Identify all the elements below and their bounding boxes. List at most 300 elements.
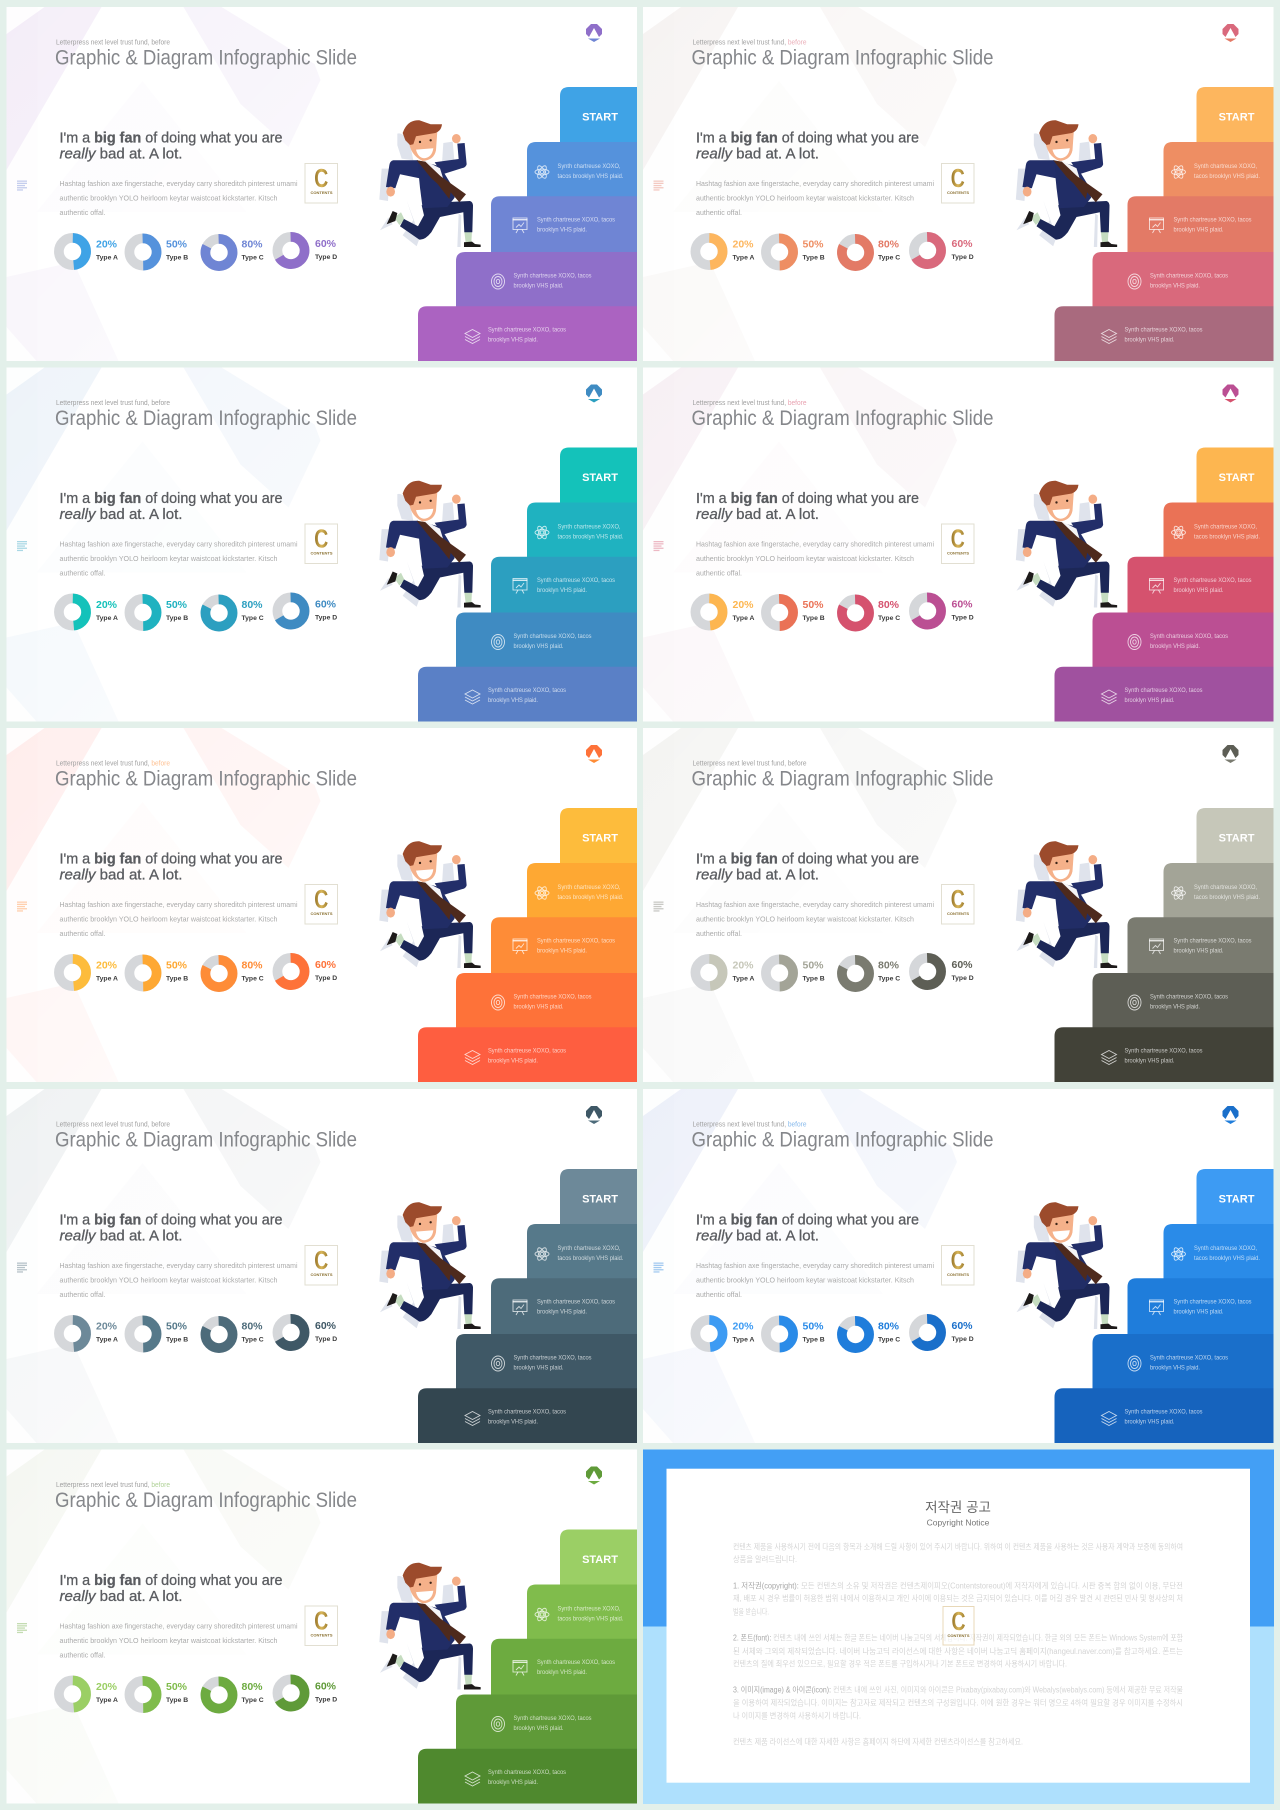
- donut B 50%: 50%: [166, 960, 188, 972]
- donut D 60%: Type D: [952, 254, 974, 261]
- gold badge: C: [951, 884, 965, 914]
- step 5: [1054, 667, 1274, 722]
- donut B 50%: 50%: [802, 599, 824, 611]
- step 1 start: START: [1219, 1194, 1255, 1206]
- heading: I'm a big fan of doing what you are: [696, 130, 919, 146]
- donut A 20%: Type A: [96, 1336, 118, 1344]
- background logo watermark: [6, 368, 346, 722]
- body text: authentic brooklyn YOLO heirloom keytar waistcoat kickstarter. Kitsch: [60, 1276, 278, 1284]
- icon: side menu: [17, 180, 27, 191]
- step 3: Synth chartreuse XOXO, tacos: [1174, 577, 1252, 584]
- gold badge: CONTENTS: [947, 1272, 969, 1277]
- heading: I'm a big fan of doing what you are: [60, 1212, 282, 1228]
- step 2: Synth chartreuse XOXO,: [558, 163, 621, 170]
- notice intro: 상품을 알려드립니다.: [733, 1554, 797, 1564]
- gold badge: [942, 1245, 974, 1285]
- step 4: Synth chartreuse XOXO, tacos: [514, 1715, 592, 1722]
- donut B 50%: 50%: [166, 599, 188, 611]
- step 2: tacos brooklyn VHS plaid.: [1194, 1255, 1260, 1262]
- step 3: [491, 1278, 637, 1335]
- icon: logo: [586, 384, 602, 402]
- step 4: brooklyn VHS plaid.: [1150, 1004, 1200, 1010]
- gold badge: [942, 524, 974, 564]
- step 5: Synth chartreuse XOXO, tacos: [488, 326, 566, 334]
- icon: side menu: [654, 541, 664, 551]
- step 2: Synth chartreuse XOXO,: [1194, 1245, 1257, 1252]
- heading: I'm a big fan of doing what you are: [60, 490, 282, 507]
- donut D 60%: [914, 1319, 974, 1346]
- step 4: Synth chartreuse XOXO, tacos: [1150, 272, 1228, 280]
- body text: authentic offal.: [60, 1290, 106, 1299]
- donut B 50%: Type B: [166, 615, 188, 622]
- donut D 60%: 60%: [315, 238, 337, 250]
- step 5: [418, 1749, 637, 1804]
- heading: [696, 130, 919, 162]
- step 1 start: START: [582, 472, 618, 484]
- donut A 20%: Type A: [732, 1336, 754, 1344]
- step 2: Synth chartreuse XOXO,: [558, 1606, 621, 1612]
- donut D 60%: Type D: [315, 614, 337, 622]
- background logo watermark: [643, 728, 983, 1082]
- donut A 20%: [695, 958, 754, 987]
- step 2: [527, 1584, 637, 1640]
- step 2: tacos brooklyn VHS plaid.: [1194, 173, 1260, 180]
- illustration: running businessman: [1016, 120, 1117, 247]
- notice clause 2: 된 서체와 그외의 제작되었습니다. 네이버 나눔고딕 라이선스에 대한 사항은 네이버 나눔고딕 홈페이지(hangeul.naver.com)를 참고하세요. 폰트는: [733, 1646, 1183, 1656]
- donut D 60%: Type D: [315, 1696, 337, 1704]
- donut B 50%: [129, 959, 188, 987]
- icon: side menu: [654, 180, 664, 191]
- step 3: Synth chartreuse XOXO, tacos: [1174, 1298, 1252, 1306]
- notice clause 1: 재, 배포 시 경우 법률이 허용한 범위 내에서 이용하시고 개인 사이에 이용되는 것은 금지되어 있습니다. 이를 어길 경우 발견 시 관련된 민사 및 형사상의 처: [733, 1593, 1183, 1603]
- body text: authentic offal.: [60, 1650, 106, 1660]
- panel background: [6, 7, 637, 361]
- step 4: [456, 973, 637, 1028]
- panel background: [643, 728, 1274, 1082]
- step 1 start: [560, 87, 637, 143]
- step 3: Synth chartreuse XOXO, tacos: [1174, 938, 1252, 944]
- step 4: brooklyn VHS plaid.: [514, 1364, 564, 1372]
- donut D 60%: Type D: [952, 1336, 974, 1343]
- donut C 80%: Type C: [242, 615, 264, 622]
- donut C 80%: [205, 960, 264, 987]
- heading: [696, 1212, 919, 1244]
- step 4: [1092, 612, 1274, 668]
- icon: logo: [1222, 384, 1238, 402]
- upper blue band: [643, 1450, 1274, 1626]
- body text: authentic brooklyn YOLO heirloom keytar waistcoat kickstarter. Kitsch: [696, 1276, 914, 1284]
- donut D 60%: Type D: [315, 975, 337, 982]
- step 5: [418, 667, 637, 722]
- step 1 start: START: [582, 112, 618, 124]
- icon: side menu: [654, 902, 664, 912]
- donut D 60%: [277, 597, 337, 625]
- panel background: [643, 368, 1274, 722]
- step 4: Synth chartreuse XOXO, tacos: [514, 633, 592, 640]
- donut C 80%: Type C: [878, 254, 900, 262]
- step 5: brooklyn VHS plaid.: [488, 336, 538, 344]
- donut C 80%: Type C: [878, 1336, 900, 1344]
- heading: [60, 1212, 282, 1244]
- step 1 start: [560, 808, 637, 864]
- donut A 20%: [58, 1680, 118, 1708]
- donut A 20%: [58, 958, 118, 987]
- gold badge: CONTENTS: [310, 550, 333, 556]
- panel background: [643, 1089, 1274, 1443]
- step 4: [1092, 973, 1274, 1028]
- slide 9: green: [6, 1450, 637, 1804]
- step 3: brooklyn VHS plaid.: [1174, 226, 1224, 234]
- heading: really bad at. A lot.: [696, 146, 819, 162]
- body text: Hashtag fashion axe fingerstache, everyday carry shoreditch pinterest umami: [696, 179, 934, 188]
- step 3: [491, 196, 637, 253]
- donut B 50%: [129, 238, 188, 266]
- donut D 60%: 60%: [315, 959, 337, 971]
- icon: logo: [586, 745, 602, 763]
- notice title: Copyright Notice: [927, 1518, 990, 1528]
- panel background: [6, 1450, 637, 1804]
- step 4: [1092, 252, 1274, 307]
- step 2: Synth chartreuse XOXO,: [1194, 163, 1257, 170]
- gold badge: CONTENTS: [947, 550, 969, 556]
- notice clause 2: 컨텐츠의 질에 최우선 있으므로, 필요할 경우 적은 폰트를 구입하시거나 기본 폰트로 변경하여 사용하시기 바랍니다.: [733, 1658, 1067, 1668]
- body text: Hashtag fashion axe fingerstache, everyday carry shoreditch pinterest umami: [60, 179, 298, 188]
- donut D 60%: 60%: [315, 598, 337, 610]
- donut A 20%: 20%: [96, 1681, 118, 1693]
- title: Graphic & Diagram Infographic Slide: [55, 1128, 357, 1152]
- donut A 20%: 20%: [732, 1320, 754, 1332]
- gold badge: C: [314, 1245, 328, 1275]
- step 4: brooklyn VHS plaid.: [514, 1004, 564, 1010]
- step 1 start: START: [582, 1194, 618, 1206]
- step 4: Synth chartreuse XOXO, tacos: [1150, 994, 1228, 1000]
- step 1 start: START: [582, 1554, 618, 1566]
- step 3: brooklyn VHS plaid.: [537, 587, 587, 594]
- gold badge: C: [951, 163, 965, 193]
- background logo watermark: [6, 7, 346, 361]
- donut A 20%: [695, 237, 754, 266]
- slide 2: orange rose: [643, 7, 1274, 361]
- body text: Hashtag fashion axe fingerstache, everyday carry shoreditch pinterest umami: [60, 900, 298, 909]
- step 3: Synth chartreuse XOXO, tacos: [537, 216, 615, 224]
- step 5: brooklyn VHS plaid.: [1124, 336, 1175, 344]
- donut D 60%: 60%: [315, 1680, 337, 1692]
- white notice card: [666, 1469, 1250, 1783]
- notice intro: [733, 1542, 1183, 1564]
- step 3: [1128, 557, 1274, 614]
- body text: authentic brooklyn YOLO heirloom keytar waistcoat kickstarter. Kitsch: [60, 554, 278, 563]
- donut B 50%: Type B: [802, 254, 825, 262]
- heading: really bad at. A lot.: [60, 146, 182, 162]
- donut C 80%: [205, 599, 264, 627]
- heading: really bad at. A lot.: [60, 1228, 182, 1244]
- eyebrow text: Letterpress next level trust fund, before: [692, 758, 806, 768]
- step 3: brooklyn VHS plaid.: [537, 1308, 587, 1316]
- donut B 50%: [766, 1320, 825, 1348]
- body text: [696, 540, 934, 578]
- icon: side menu: [17, 1623, 27, 1633]
- body text: [60, 540, 298, 578]
- step 2: Synth chartreuse XOXO,: [558, 884, 621, 891]
- illustration: running businessman: [379, 120, 481, 247]
- notice closing: 컨텐츠 제품 라이선스에 대한 자세한 사항은 홈페이지 하단에 자세한 컨텐츠라이선스를 참고하세요.: [733, 1736, 1023, 1746]
- gold badge: C: [314, 884, 328, 914]
- heading: I'm a big fan of doing what you are: [60, 850, 282, 868]
- icon: side menu: [17, 541, 27, 551]
- step 5: [1054, 1027, 1274, 1082]
- slide 4: amber magenta: [643, 368, 1274, 722]
- donut C 80%: 80%: [878, 599, 900, 611]
- background logo watermark: [643, 1089, 983, 1443]
- body text: authentic offal.: [696, 1290, 742, 1299]
- gold badge: [943, 1606, 974, 1645]
- donut D 60%: Type D: [952, 614, 974, 622]
- donut B 50%: 50%: [802, 960, 824, 972]
- slide 7: slate: [6, 1089, 637, 1443]
- body text: authentic offal.: [60, 929, 106, 938]
- body text: authentic offal.: [60, 568, 106, 578]
- donut C 80%: 80%: [242, 238, 263, 250]
- heading: really bad at. A lot.: [696, 506, 819, 523]
- gold badge: CONTENTS: [310, 911, 333, 916]
- step 3: [491, 917, 637, 974]
- donut B 50%: [766, 959, 825, 987]
- slide 3: teal blue: [6, 368, 637, 722]
- step 2: [527, 863, 637, 918]
- gold badge: [305, 163, 338, 203]
- step 4: brooklyn VHS plaid.: [514, 1725, 564, 1732]
- body text: authentic offal.: [696, 929, 742, 938]
- icon: logo: [1222, 745, 1238, 763]
- donut A 20%: Type A: [96, 615, 118, 622]
- donut D 60%: Type D: [315, 254, 337, 261]
- notice clause 1: 벌을 받습니다.: [733, 1606, 769, 1616]
- step 4: Synth chartreuse XOXO, tacos: [514, 1354, 592, 1362]
- body text: Hashtag fashion axe fingerstache, everyday carry shoreditch pinterest umami: [60, 1261, 298, 1270]
- step 2: [527, 1224, 637, 1279]
- donut B 50%: [129, 599, 188, 626]
- donut C 80%: [842, 238, 900, 266]
- donut D 60%: Type D: [315, 1336, 337, 1343]
- donut C 80%: [205, 1320, 264, 1348]
- notice clause 3: [733, 1684, 1183, 1720]
- step 1 start: START: [1219, 112, 1255, 124]
- donut A 20%: Type A: [732, 615, 754, 622]
- step 4: [456, 1694, 637, 1750]
- gold badge: CONTENTS: [948, 1633, 970, 1638]
- step 1 start: START: [582, 832, 618, 844]
- eyebrow text: Letterpress next level trust fund, before: [56, 38, 170, 46]
- donut B 50%: 50%: [802, 1320, 824, 1332]
- slide 6: khaki grey: [643, 728, 1274, 1082]
- icon: logo: [586, 1106, 602, 1124]
- donut A 20%: Type A: [96, 1697, 118, 1704]
- step 2: [1164, 1224, 1274, 1279]
- donut C 80%: Type C: [242, 254, 264, 262]
- gold badge: C: [314, 524, 328, 554]
- step 3: brooklyn VHS plaid.: [1174, 1308, 1224, 1316]
- notice intro: 컨텐츠 제품을 사용하시기 전에 다음의 항목과 소개해 드릴 사항이 있어 주시기 바랍니다. 위하여 이 컨텐츠 제품을 사용하는 것은 사용자 계약과 보증에 동의하여: [733, 1542, 1183, 1552]
- donut A 20%: Type A: [96, 254, 118, 262]
- step 4: brooklyn VHS plaid.: [1150, 643, 1200, 650]
- donut A 20%: [695, 1319, 754, 1348]
- donut C 80%: [842, 1320, 900, 1348]
- notice clause 2: [733, 1632, 1184, 1668]
- donut C 80%: Type C: [242, 1697, 264, 1704]
- body text: authentic brooklyn YOLO heirloom keytar waistcoat kickstarter. Kitsch: [696, 914, 914, 924]
- step 5: Synth chartreuse XOXO, tacos: [488, 1048, 566, 1054]
- step 5: brooklyn VHS plaid.: [1124, 1058, 1175, 1064]
- eyebrow text: Letterpress next level trust fund, before: [692, 398, 807, 407]
- donut A 20%: 20%: [96, 238, 118, 250]
- step 2: [527, 142, 637, 197]
- body text: Hashtag fashion axe fingerstache, everyday carry shoreditch pinterest umami: [696, 900, 934, 909]
- step 2: tacos brooklyn VHS plaid.: [558, 534, 624, 540]
- donut D 60%: [277, 1319, 337, 1346]
- body text: authentic brooklyn YOLO heirloom keytar waistcoat kickstarter. Kitsch: [696, 194, 914, 202]
- step 3: Synth chartreuse XOXO, tacos: [537, 1298, 615, 1306]
- step 3: brooklyn VHS plaid.: [1174, 587, 1224, 594]
- step 1 start: [1196, 808, 1274, 864]
- slide 8: bright blue: [643, 1089, 1274, 1443]
- donut C 80%: [842, 960, 900, 987]
- step 5: Synth chartreuse XOXO, tacos: [1124, 1408, 1202, 1416]
- heading: I'm a big fan of doing what you are: [696, 850, 919, 868]
- body text: [60, 1261, 298, 1299]
- heading: [60, 490, 282, 523]
- gold badge: [305, 524, 338, 564]
- step 1 start: [1196, 1169, 1274, 1225]
- gold badge: C: [951, 1245, 965, 1275]
- body text: [60, 1622, 298, 1660]
- donut D 60%: 60%: [315, 1320, 337, 1332]
- step 4: brooklyn VHS plaid.: [1150, 1364, 1200, 1372]
- donut A 20%: [695, 598, 754, 626]
- icon: logo: [1222, 24, 1238, 42]
- donut B 50%: [129, 1681, 188, 1708]
- illustration: running businessman: [1016, 1202, 1117, 1329]
- step 4: Synth chartreuse XOXO, tacos: [1150, 633, 1228, 640]
- donut A 20%: 20%: [96, 599, 118, 611]
- background logo watermark: [6, 728, 346, 1082]
- gold badge: CONTENTS: [947, 190, 969, 195]
- donut C 80%: 80%: [242, 960, 263, 972]
- donut A 20%: 20%: [96, 1320, 118, 1332]
- donut C 80%: 80%: [878, 1320, 900, 1332]
- illustration: running businessman: [1016, 841, 1117, 968]
- donut C 80%: [205, 1681, 264, 1709]
- gold badge: CONTENTS: [310, 1632, 333, 1638]
- body text: authentic brooklyn YOLO heirloom keytar waistcoat kickstarter. Kitsch: [60, 1636, 278, 1645]
- panel: copyright notice: [643, 1450, 1274, 1804]
- panel background: [6, 728, 637, 1082]
- step 2: tacos brooklyn VHS plaid.: [558, 1616, 624, 1622]
- illustration: running businessman: [379, 1563, 481, 1689]
- heading: really bad at. A lot.: [696, 1228, 819, 1244]
- donut A 20%: 20%: [732, 960, 754, 972]
- panel background: [6, 1089, 637, 1443]
- step 5: [418, 306, 637, 361]
- gold badge: C: [951, 524, 965, 554]
- donut D 60%: 60%: [952, 598, 973, 610]
- heading: [60, 1572, 282, 1605]
- donut B 50%: Type B: [166, 1336, 188, 1344]
- step 4: [456, 612, 637, 668]
- title: Graphic & Diagram Infographic Slide: [55, 46, 357, 70]
- donut A 20%: [58, 1319, 118, 1348]
- body text: authentic offal.: [696, 568, 742, 578]
- donut A 20%: [58, 237, 118, 266]
- donut B 50%: Type B: [166, 976, 188, 982]
- donut D 60%: 60%: [952, 1320, 973, 1332]
- notice clause 1: 1. 저작권(copyright): 모든 컨텐츠의 소유 및 저작권은 컨텐츠제이피오(Contentstoreout)에 저작자에게 있습니다. 시판 중복 합의 없이 이용, 무단전: [733, 1580, 1183, 1590]
- lower light blue band: [643, 1626, 1274, 1804]
- body text: Hashtag fashion axe fingerstache, everyday carry shoreditch pinterest umami: [60, 540, 298, 548]
- body text: authentic brooklyn YOLO heirloom keytar waistcoat kickstarter. Kitsch: [60, 914, 278, 924]
- step 5: brooklyn VHS plaid.: [1124, 697, 1175, 704]
- body text: Hashtag fashion axe fingerstache, everyday carry shoreditch pinterest umami: [696, 1261, 934, 1270]
- gold badge: [305, 1606, 338, 1646]
- donut C 80%: [205, 238, 264, 266]
- step 3: Synth chartreuse XOXO, tacos: [1174, 216, 1252, 224]
- gold badge: CONTENTS: [947, 911, 969, 916]
- step 4: [456, 252, 637, 307]
- step 2: [527, 502, 637, 558]
- step 3: [1128, 1278, 1274, 1335]
- notice clause 3: 을 이용하여 제작되었습니다. 이미지는 참고자료 제작되고 컨텐츠의 구성원입니다. 이에 원한 경우는 워터 명으로 4하여 필요할 경우 이미지를 수정하시: [733, 1698, 1183, 1708]
- heading: I'm a big fan of doing what you are: [60, 130, 282, 146]
- donut B 50%: [766, 599, 825, 626]
- donut A 20%: Type A: [732, 976, 754, 982]
- step 1 start: [560, 1169, 637, 1225]
- eyebrow text: Letterpress next level trust fund, before: [56, 758, 170, 768]
- donut D 60%: 60%: [952, 959, 973, 971]
- illustration: running businessman: [379, 1202, 481, 1329]
- donut C 80%: 80%: [878, 238, 900, 250]
- step 2: tacos brooklyn VHS plaid.: [558, 1255, 624, 1262]
- step 2: Synth chartreuse XOXO,: [558, 1245, 621, 1252]
- background logo watermark: [643, 368, 983, 722]
- donut A 20%: 20%: [732, 599, 754, 611]
- step 5: Synth chartreuse XOXO, tacos: [488, 1408, 566, 1416]
- heading: I'm a big fan of doing what you are: [696, 490, 919, 507]
- step 2: Synth chartreuse XOXO,: [558, 524, 621, 530]
- step 1 start: START: [1219, 472, 1255, 484]
- notice title: 저작권 공고: [925, 1500, 991, 1515]
- illustration: running businessman: [379, 481, 481, 607]
- step 3: Synth chartreuse XOXO, tacos: [537, 577, 615, 584]
- body text: [60, 179, 298, 217]
- donut C 80%: 80%: [242, 1681, 263, 1693]
- donut A 20%: 20%: [96, 960, 118, 972]
- panel background: [643, 7, 1274, 361]
- body text: authentic brooklyn YOLO heirloom keytar waistcoat kickstarter. Kitsch: [696, 554, 914, 563]
- title: Graphic & Diagram Infographic Slide: [692, 1128, 994, 1152]
- donut C 80%: Type C: [878, 976, 900, 982]
- body text: Hashtag fashion axe fingerstache, everyday carry shoreditch pinterest umami: [60, 1622, 298, 1630]
- gold badge: CONTENTS: [310, 1272, 333, 1277]
- step 2: tacos brooklyn VHS plaid.: [558, 894, 624, 901]
- step 3: brooklyn VHS plaid.: [537, 1669, 587, 1676]
- gold badge: [305, 884, 338, 924]
- eyebrow text: Letterpress next level trust fund, before: [56, 398, 170, 407]
- donut D 60%: [277, 1679, 337, 1707]
- step 5: [1054, 1388, 1274, 1443]
- step 5: [418, 1388, 637, 1443]
- step 2: [1164, 863, 1274, 918]
- illustration: running businessman: [379, 841, 481, 968]
- donut D 60%: [277, 237, 337, 264]
